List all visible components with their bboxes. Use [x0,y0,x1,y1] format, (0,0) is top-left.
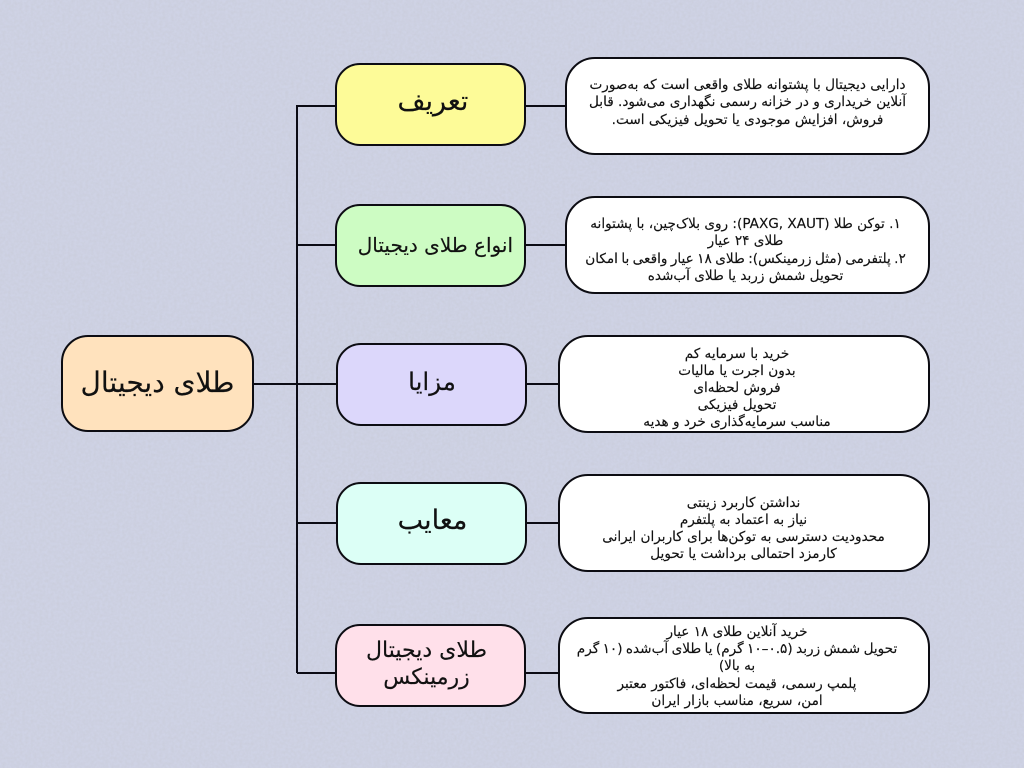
category: disadvantages [336,482,527,565]
text panel: advantages: بدون اجرت یا مالیات [678,363,796,379]
text panel: disadvantages: کارمزد احتمالی برداشت یا تحویل [650,546,837,562]
text panel: advantages [558,335,930,433]
root node: digital gold [61,335,254,432]
text panel: advantages: فروش لحظه‌ای [693,380,781,396]
text panel: advantages: تحویل فیزیکی [698,397,776,413]
text panel: disadvantages: محدودیت دسترسی به توکن‌ها برای کاربران ایرانی [602,529,885,545]
text panel: definition: دارایی دیجیتال با پشتوانه طلای واقعی است که به‌صورت [589,77,906,93]
text panel: Zarminex: به بالا) [719,658,755,674]
text panel: types: تحویل شمش زربد یا طلای آب‌شده [648,268,843,284]
text panel: disadvantages: نیاز به اعتماد به پلتفرم [680,512,807,528]
text panel: types [565,196,930,294]
text panel: types: طلای ۲۴ عیار [708,233,783,249]
text panel: Zarminex [558,617,930,714]
text panel: advantages: خرید با سرمایه کم [685,346,789,362]
category: Zarminex digital gold: زرمینکس [383,665,470,690]
category: types of digital gold: انواع طلای دیجیتال [358,232,513,256]
category: types of digital gold [335,204,526,287]
text panel: disadvantages [558,474,930,572]
category: definition: تعریف [398,86,468,117]
text panel: definition: آنلاین خریداری و در خزانه رسمی نگهداری می‌شود. قابل [589,94,906,110]
category: advantages [336,343,527,426]
text panel: advantages: مناسب سرمایه‌گذاری خرد و هدیه [643,414,831,430]
text panel: Zarminex: خرید آنلاین طلای ۱۸ عیار [666,624,808,640]
category: Zarminex digital gold [335,624,526,707]
text panel: definition: فروش، افزایش موجودی یا تحویل فیزیکی است. [612,112,883,128]
category: disadvantages: معایب [398,504,467,536]
text panel: Zarminex: تحویل شمش زربد (۰.۵–۱۰ گرم) یا طلای آب‌شده (۱۰ گرم [577,641,897,657]
text panel: Zarminex: امن، سریع، مناسب بازار ایران [651,693,823,709]
text panel: Zarminex: پلمپ رسمی، قیمت لحظه‌ای، فاکتور معتبر [618,676,856,692]
category: Zarminex digital gold: طلای دیجیتال [366,638,487,663]
text panel: types: ۱. توکن طلا (PAXG, XAUT): روی بلاک‌چین، با پشتوانه [590,216,901,232]
category: advantages: مزایا [408,366,456,396]
text panel: disadvantages: نداشتن کاربرد زینتی [687,495,800,511]
text panel: definition [565,57,930,155]
text panel: types: ۲. پلتفرمی (مثل زرمینکس): طلای ۱۸ عیار واقعی با امکان [585,250,906,266]
root node: digital gold: طلای دیجیتال [81,366,234,399]
category: definition [335,63,526,146]
